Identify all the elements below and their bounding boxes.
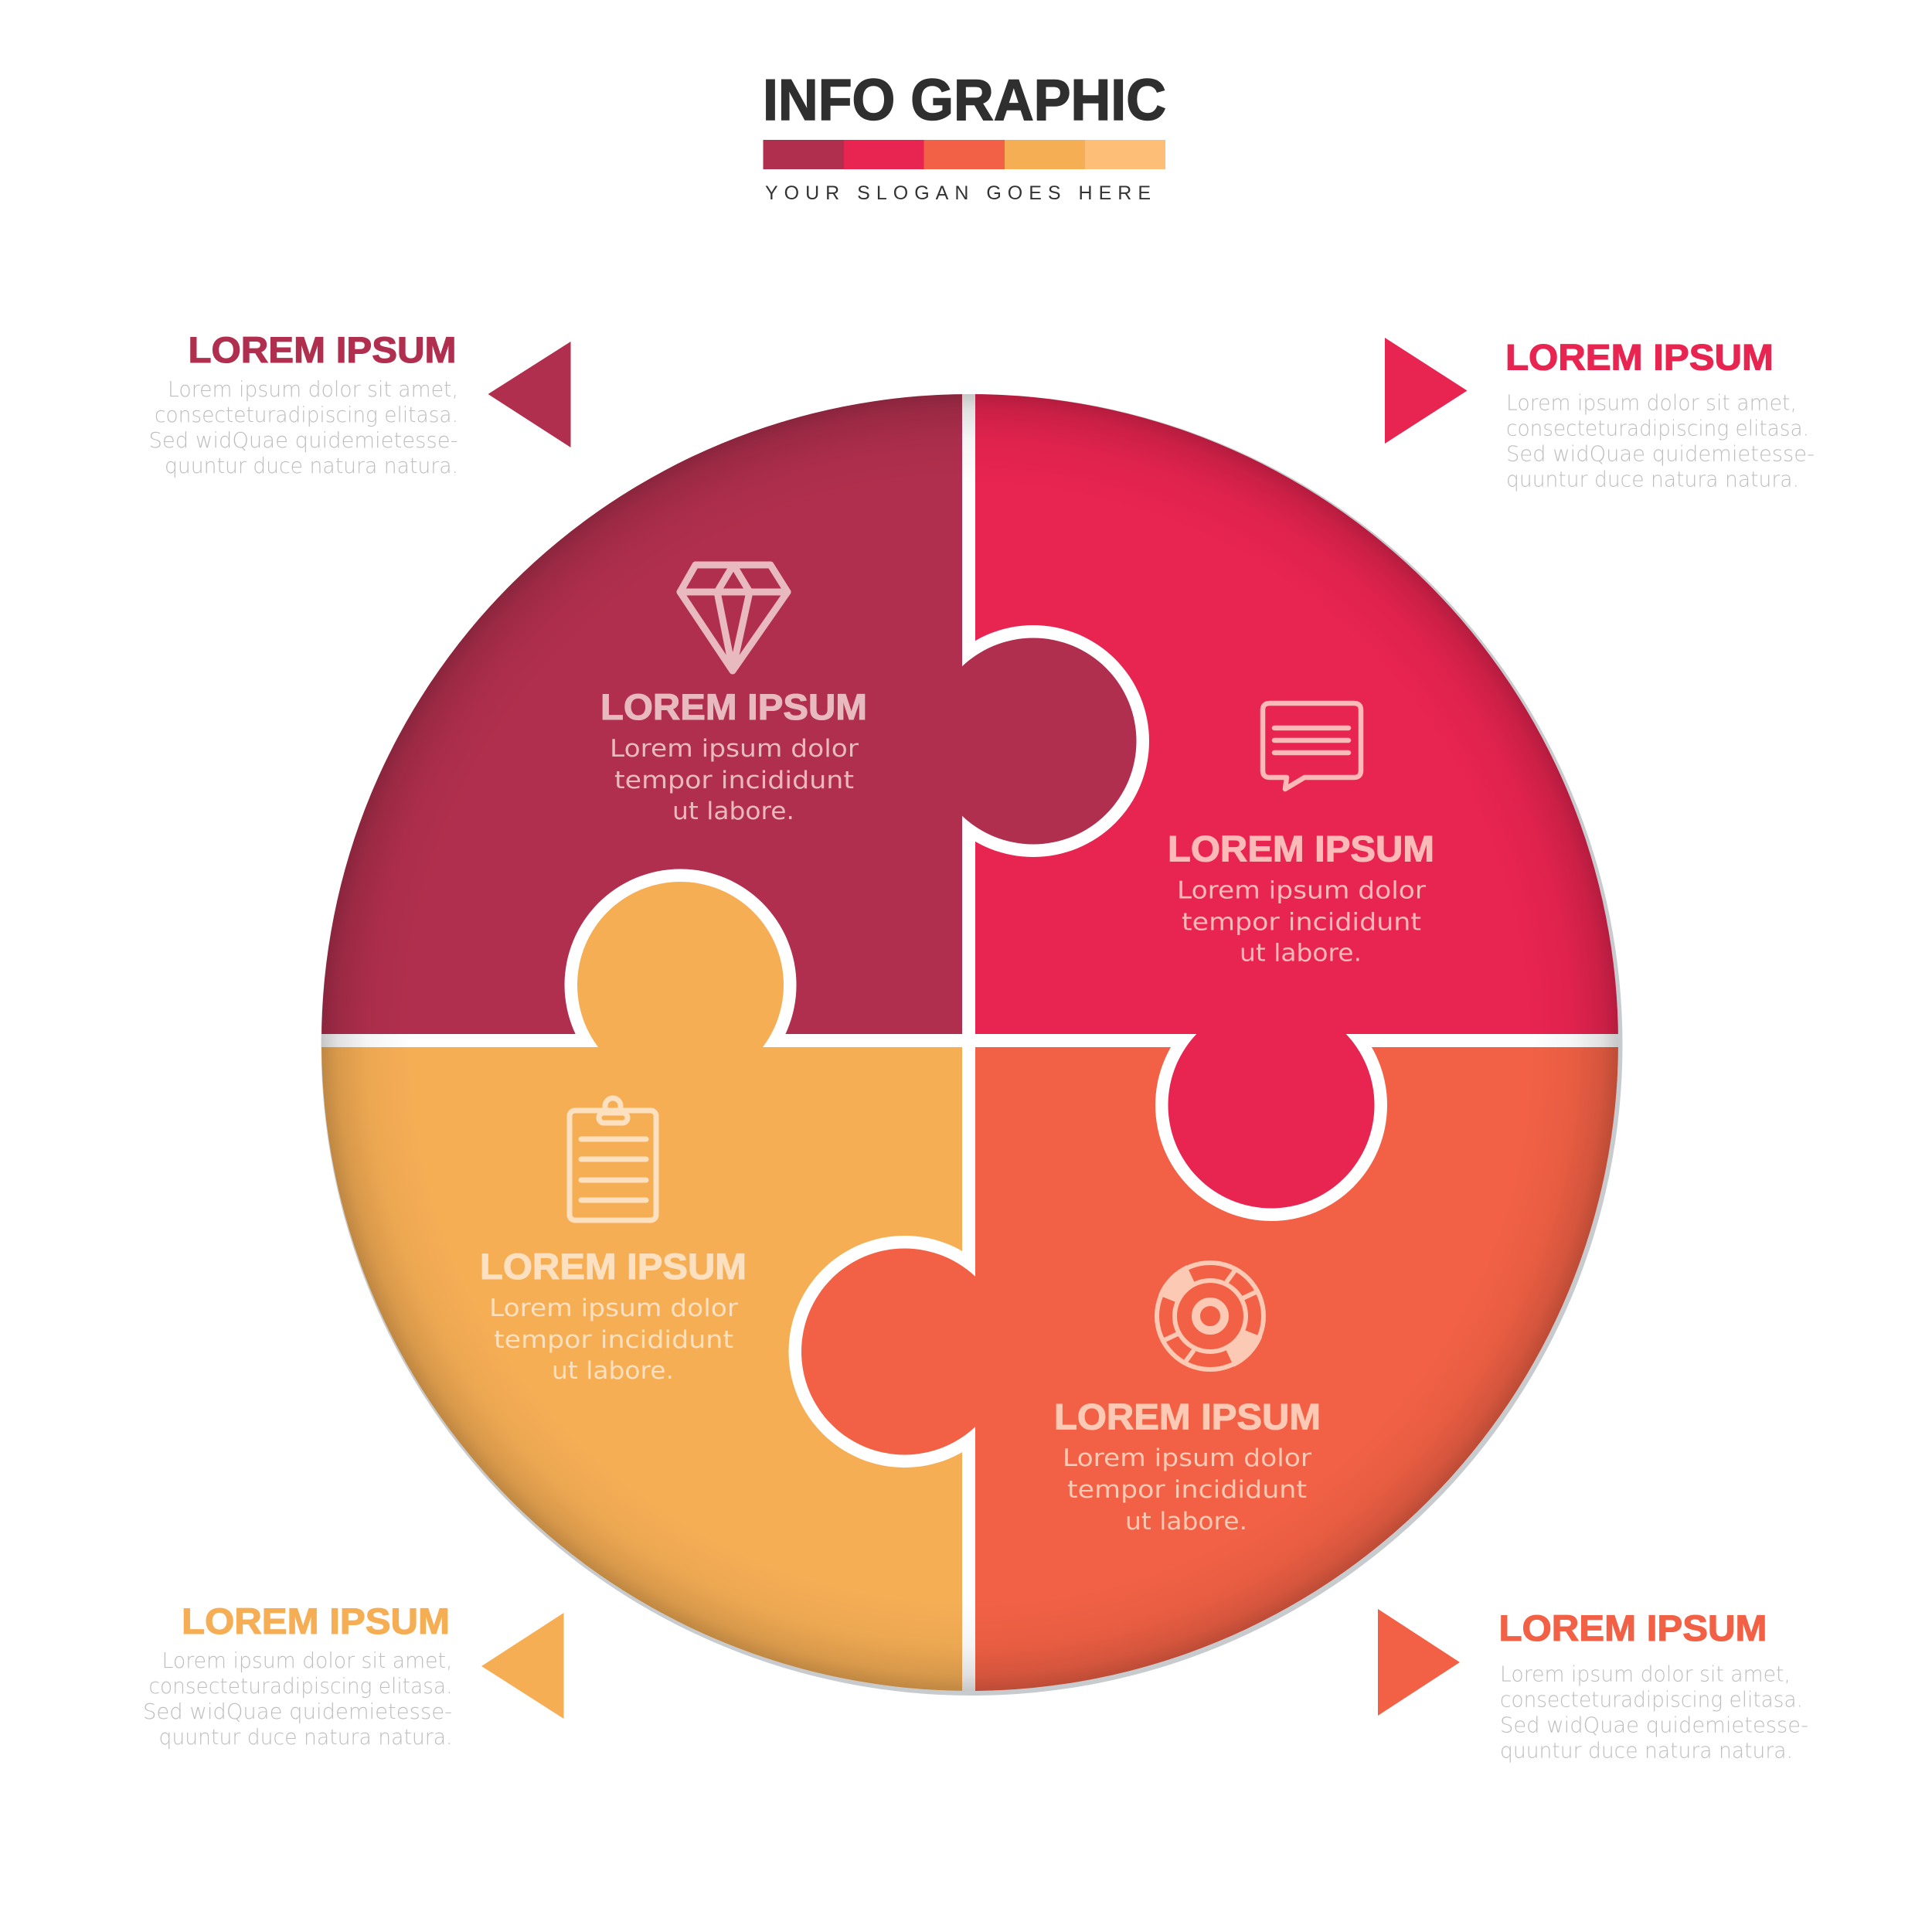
piece: crimson — [975, 386, 1638, 1034]
callout: bottom right — [1499, 1607, 1808, 1764]
callout: top right: Sed widQuae quidemietesse- — [1506, 440, 1815, 467]
callout: bottom right: Lorem ipsum dolor sit amet, — [1500, 1662, 1791, 1686]
label: amber piece: tempor incididunt — [494, 1326, 733, 1354]
label: maroon piece: LOREM IPSUM — [600, 686, 867, 727]
callout: top left: quuntur duce natura natura. — [165, 453, 458, 478]
knob: crimson into orange — [1155, 1034, 1387, 1221]
label: crimson piece: tempor incididunt — [1182, 909, 1421, 937]
piece: amber — [309, 1047, 962, 1716]
label: crimson piece: Lorem ipsum dolor — [1177, 876, 1426, 904]
icon: speech bubble — [1263, 703, 1361, 789]
label: orange piece: tempor incididunt — [1067, 1476, 1307, 1504]
piece: orange — [975, 1047, 1638, 1716]
callout: top right: quuntur duce natura natura. — [1506, 467, 1799, 492]
label: maroon piece: Lorem ipsum dolor — [610, 735, 859, 763]
callout: bottom right: consecteturadipiscing elitasa. — [1500, 1686, 1803, 1713]
callout: bottom right: LOREM IPSUM — [1499, 1607, 1767, 1648]
callout: top left — [148, 329, 458, 478]
callout: bottom left: Lorem ipsum dolor sit amet, — [162, 1648, 453, 1673]
callout: top left: Lorem ipsum dolor sit amet, — [168, 376, 458, 402]
knob: maroon into crimson — [962, 625, 1149, 857]
label: maroon piece: tempor incididunt — [614, 767, 854, 794]
label: amber piece: LOREM IPSUM — [480, 1246, 747, 1287]
title: INFO GRAPHIC — [763, 67, 1166, 132]
callout: bottom left: Sed widQuae quidemietesse- — [143, 1699, 452, 1724]
callout: top right — [1505, 337, 1815, 492]
icon: poker chip — [1157, 1263, 1264, 1369]
callout: top right: consecteturadipiscing elitasa. — [1506, 416, 1809, 440]
colour bar — [764, 140, 1165, 169]
arrow: top right — [1385, 338, 1467, 444]
callout: top left: Sed widQuae quidemietesse- — [148, 427, 457, 453]
disc drop edge — [321, 394, 1623, 1696]
label: amber piece: ut labore. — [552, 1357, 674, 1385]
label: orange piece — [1054, 1396, 1321, 1536]
label: orange piece: ut labore. — [1125, 1508, 1247, 1536]
icon: diamond — [680, 565, 787, 671]
arrow: bottom right — [1378, 1609, 1460, 1716]
label: maroon piece — [600, 686, 867, 825]
slogan: YOUR SLOGAN GOES HERE — [765, 182, 1151, 204]
label: crimson piece — [1168, 828, 1434, 968]
callout: bottom left — [143, 1600, 453, 1750]
callout: top right: LOREM IPSUM — [1505, 337, 1774, 377]
callout: top left: LOREM IPSUM — [189, 329, 456, 370]
piece: maroon — [309, 386, 962, 1034]
arrow: top left — [488, 342, 570, 447]
label: amber piece — [480, 1246, 747, 1385]
puzzle circle — [309, 386, 1638, 1716]
callout: bottom right: quuntur duce natura natura. — [1500, 1737, 1793, 1764]
label: crimson piece: ut labore. — [1240, 940, 1362, 968]
label: maroon piece: ut labore. — [672, 798, 794, 825]
callout: bottom left: LOREM IPSUM — [182, 1600, 450, 1641]
arrow: bottom left — [481, 1613, 564, 1719]
callout: bottom left: consecteturadipiscing elitasa. — [148, 1673, 453, 1699]
icon: clipboard — [570, 1098, 656, 1220]
callout: bottom left: quuntur duce natura natura. — [159, 1724, 453, 1750]
callout: top left: consecteturadipiscing elitasa. — [155, 402, 458, 427]
callout: top right: Lorem ipsum dolor sit amet, — [1506, 389, 1797, 416]
label: orange piece: Lorem ipsum dolor — [1063, 1444, 1311, 1472]
label: orange piece: LOREM IPSUM — [1054, 1396, 1321, 1437]
knob: amber into maroon — [564, 869, 796, 1047]
knob: orange into amber — [788, 1236, 975, 1468]
label: amber piece: Lorem ipsum dolor — [489, 1294, 738, 1322]
callout: bottom right: Sed widQuae quidemietesse- — [1500, 1713, 1808, 1737]
label: crimson piece: LOREM IPSUM — [1168, 828, 1434, 869]
rim shading — [309, 386, 1638, 1716]
